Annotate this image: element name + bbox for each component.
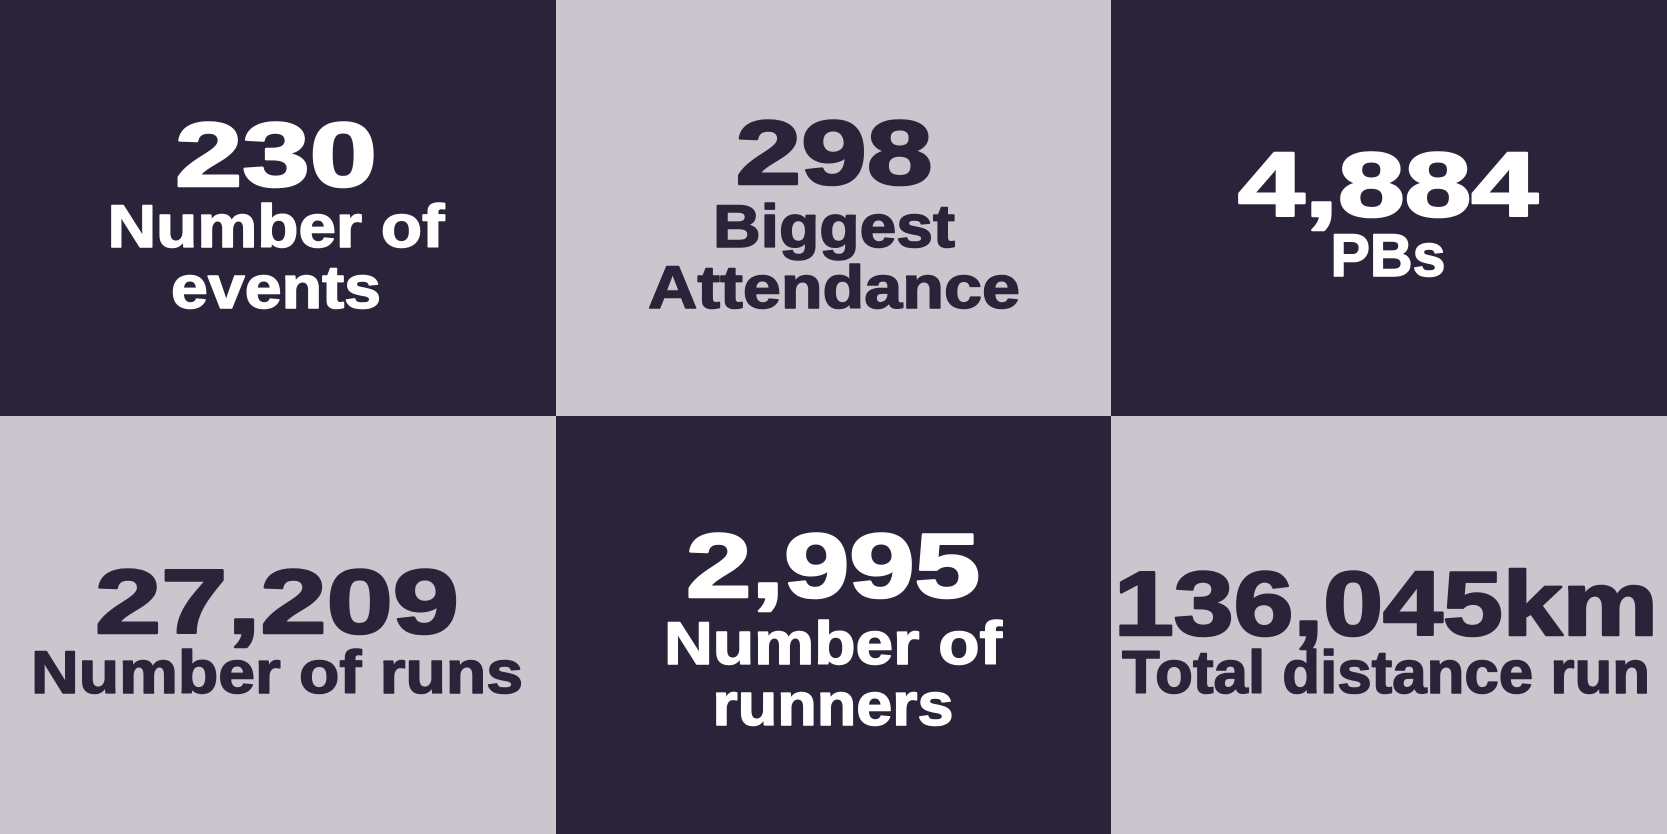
panel: PBs [1111,0,1667,416]
label: Number of runners [664,610,1003,738]
number: 136,045km: 136,045km [1114,554,1658,655]
label: PBs: PBs [1330,222,1446,289]
label: Number of runs: Number of runs [31,639,523,706]
label: Total distance run: Total distance run [1122,639,1650,706]
label: Biggest Attendance: Attendance [648,254,1020,321]
label: Number of runners: runners [712,671,954,738]
label: Number of events: Number of [108,193,446,260]
number: 4,884: 4,884 [1238,135,1538,236]
panel: number of runners [556,416,1111,834]
number: 230: 230 [175,105,377,206]
panel: total distance run [1111,416,1667,834]
number: 27,209: 27,209 [95,552,459,653]
label: Number of events [108,193,446,321]
number: 2,995: 2,995 [686,516,980,617]
number: 298: 298 [736,103,932,204]
panel: number of runs [0,416,556,834]
panel: number of events [0,0,556,416]
label: Number of runners: Number of [664,610,1003,677]
label: Number of events: events [171,254,381,321]
panel: biggest attendance [556,0,1111,416]
label: Biggest Attendance [648,193,1020,321]
label: Biggest Attendance: Biggest [713,193,955,260]
